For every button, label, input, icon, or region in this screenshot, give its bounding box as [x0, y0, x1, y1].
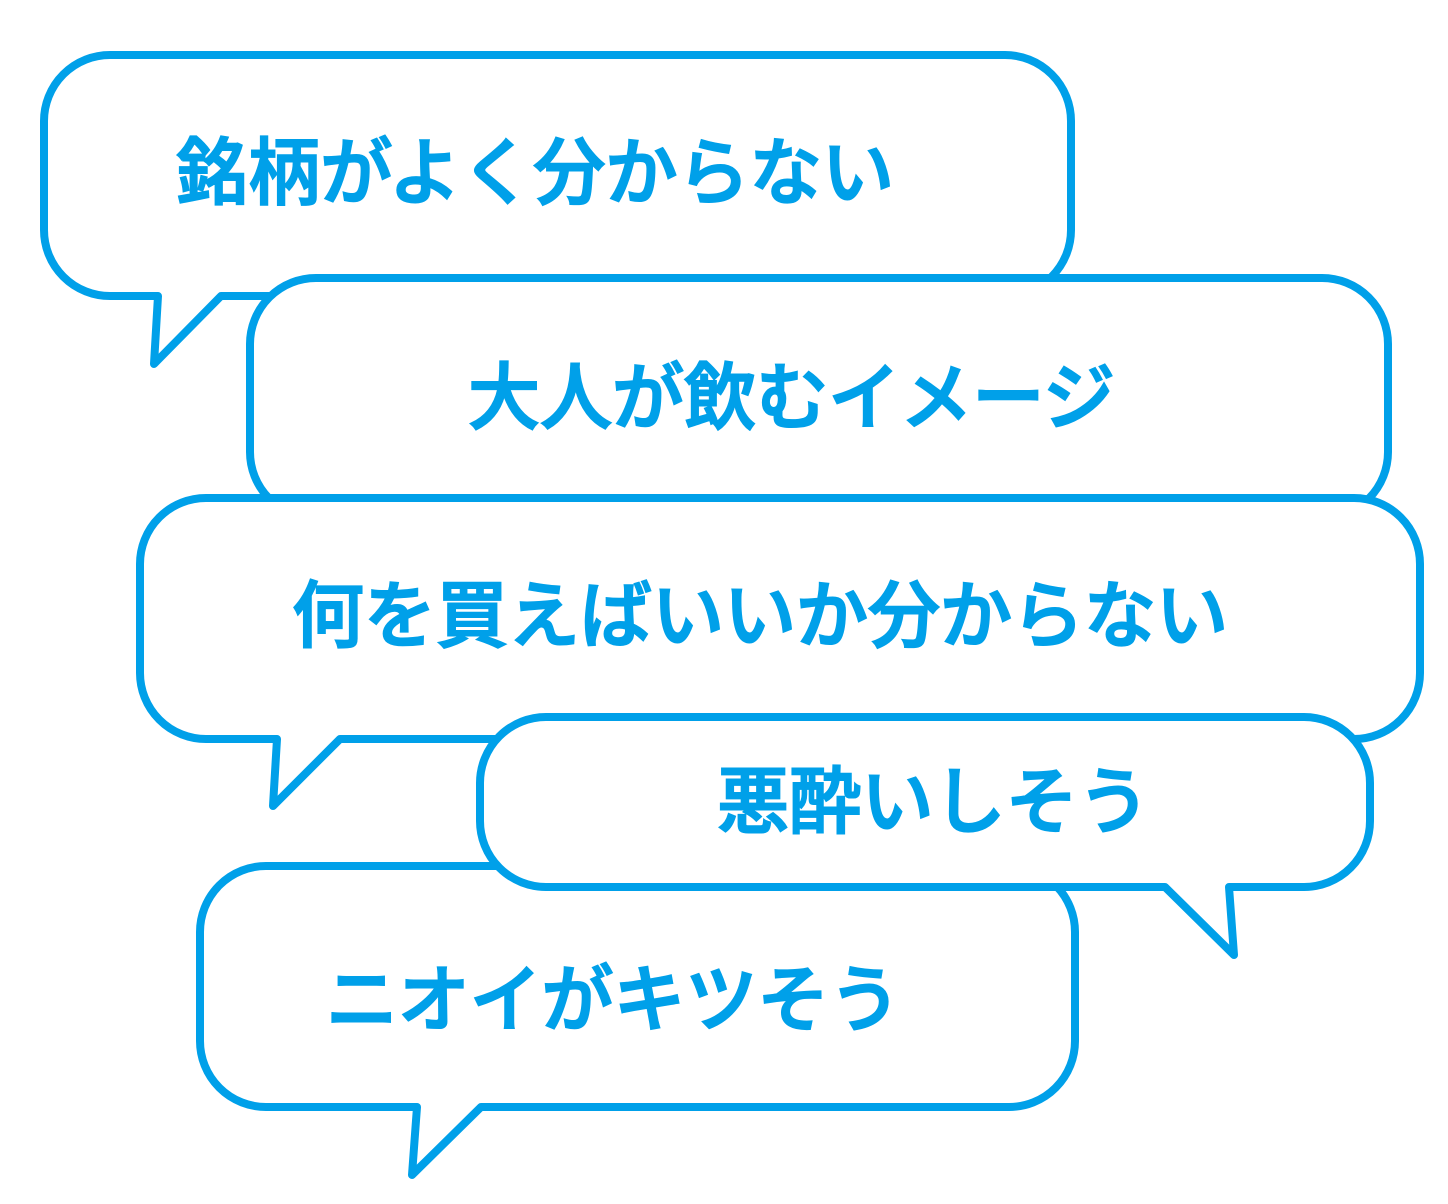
bubble: 大人が飲むイメージ: 大人が飲むイメージ [468, 358, 1115, 439]
bubble: 銘柄がよく分からない [44, 55, 1071, 364]
bubble: 大人が飲むイメージ [250, 278, 1388, 518]
bubble: 銘柄がよく分からない: 銘柄がよく分からない [176, 133, 894, 214]
bubble: 何を買えばいいか分からない: 何を買えばいいか分からない [292, 576, 1228, 657]
bubble: 悪酔いしそう: 悪酔いしそう [717, 762, 1150, 843]
bubble: 悪酔いしそう [480, 717, 1370, 955]
bubble: ニオイがキツそう: ニオイがキツそう [326, 960, 901, 1041]
bubble: 何を買えばいいか分からない [140, 498, 1420, 806]
bubble: ニオイがキツそう [200, 866, 1075, 1175]
